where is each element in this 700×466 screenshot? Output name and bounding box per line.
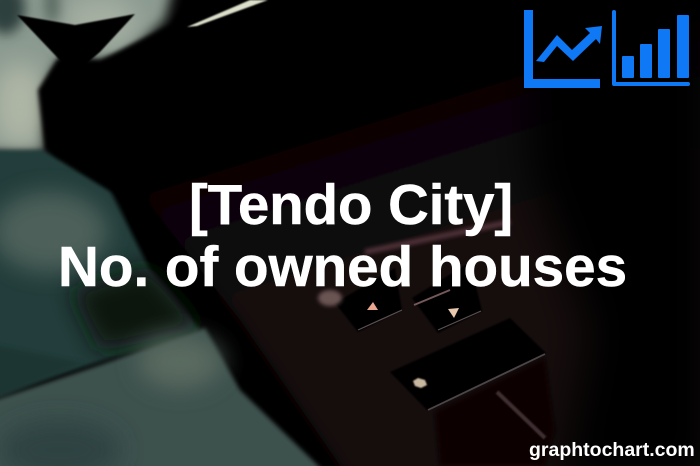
title line 1: [Tendo City] xyxy=(189,173,513,236)
fabric and light areas xyxy=(0,0,333,466)
device buttons xyxy=(318,222,555,466)
icon: bar chart xyxy=(612,10,690,86)
title line 2: No. of owned houses xyxy=(58,235,627,298)
site watermark: graphtochart.com xyxy=(529,439,695,461)
dark star shape xyxy=(17,14,135,75)
pale light streak xyxy=(187,0,268,27)
icon: line chart with arrow xyxy=(524,10,602,88)
